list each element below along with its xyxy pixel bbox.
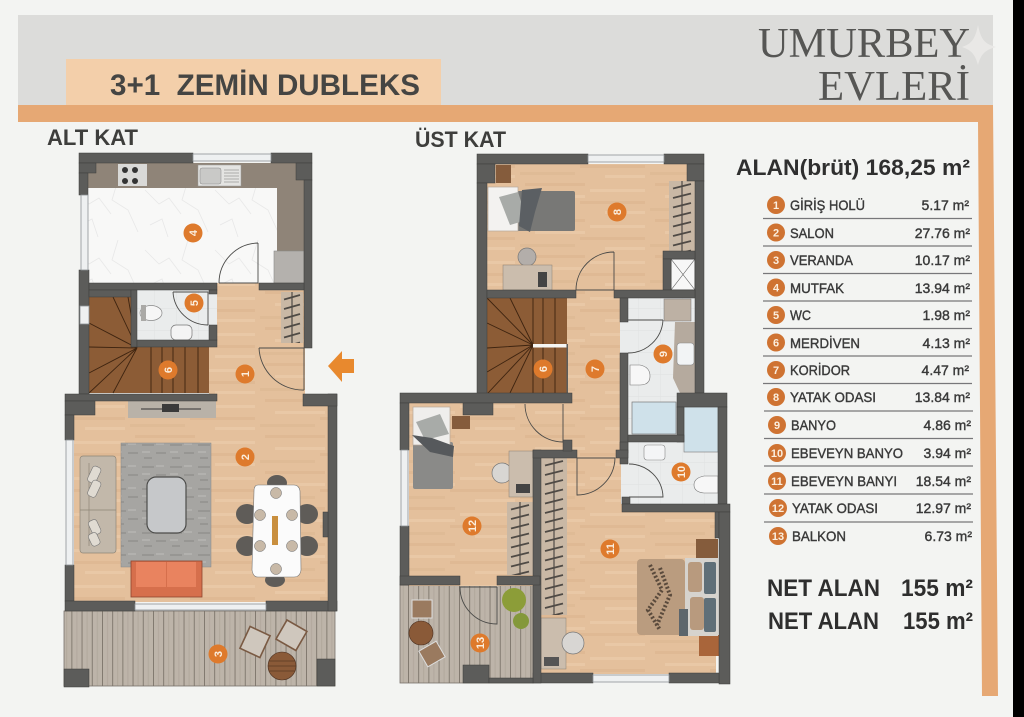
hall closet (281, 292, 303, 343)
room names: WC (790, 307, 811, 323)
balcony (400, 585, 533, 683)
sink (198, 165, 241, 186)
room numbers: 2 (240, 454, 252, 460)
badge numbers: 12 (772, 503, 784, 515)
doors (173, 243, 304, 390)
terrace furniture (240, 620, 307, 680)
balcony furniture (409, 588, 529, 667)
room names: VERANDA (790, 252, 854, 268)
net area lines: NET ALAN (768, 608, 879, 635)
badge numbers (771, 200, 784, 543)
room names: EBEVEYN BANYO (791, 445, 903, 461)
room areas: 5.17 m² (922, 197, 969, 213)
room areas: 4.86 m² (924, 417, 971, 433)
room names: EBEVEYN BANYI (791, 473, 897, 489)
stairs (89, 297, 209, 393)
walls (64, 153, 337, 687)
bath 10 floor (621, 442, 718, 504)
heading: alt kat: ALT KAT (47, 125, 139, 150)
net area lines: 155 m² (903, 608, 973, 635)
badge numbers: 8 (773, 392, 779, 404)
desk room 12 (492, 451, 533, 497)
bath 9 floor (620, 298, 695, 436)
room numbers: 12 (467, 520, 479, 532)
room numbers: 6 (538, 366, 550, 372)
badge numbers: 10 (771, 448, 783, 460)
gross area heading: ALAN(brüt) 168,25 m² (736, 155, 970, 180)
room numbers: 7 (590, 366, 602, 372)
nightstand and desk room 8 (496, 165, 552, 290)
brand name: EVLERİ (818, 64, 970, 110)
room numbers: 9 (658, 351, 670, 357)
bedroom 11 floor (540, 450, 716, 674)
bedroom 12 floor (409, 403, 568, 586)
terrace (64, 611, 335, 686)
hall floor (209, 283, 305, 398)
room numbers: 10 (676, 466, 688, 478)
bath 9 fittings (630, 299, 694, 434)
badge numbers: 5 (773, 310, 779, 322)
divider lines (763, 218, 973, 522)
dining set (236, 475, 318, 587)
room areas: 12.97 m² (916, 500, 971, 516)
room areas: 13.84 m² (915, 389, 970, 405)
photo border (1013, 0, 1024, 717)
room names: YATAK ODASI (792, 500, 878, 516)
room names: SALON (790, 225, 834, 241)
sofa left (80, 456, 116, 553)
room numbers (462, 202, 690, 652)
room names: GİRİŞ HOLÜ (790, 196, 865, 213)
room names: BALKON (792, 528, 846, 544)
room areas: 3.94 m² (924, 445, 971, 461)
brand name: UMURBEY (758, 21, 970, 67)
room numbers: 1 (240, 371, 252, 377)
bedroom 8 floor (487, 164, 687, 298)
room areas: 1.98 m² (923, 307, 970, 323)
badge numbers: 1 (773, 200, 779, 212)
room numbers: 11 (605, 543, 617, 555)
header band (18, 15, 996, 110)
panel: area table (736, 155, 973, 635)
room numbers: 8 (612, 209, 624, 215)
coffee table (147, 477, 186, 533)
stove (118, 164, 147, 186)
room names: BANYO (791, 417, 836, 433)
windows (401, 155, 669, 682)
net area lines (767, 575, 973, 635)
badge numbers: 7 (773, 365, 779, 377)
bath 9 counter (673, 322, 695, 393)
net area lines: NET ALAN (767, 575, 880, 602)
stairs (487, 298, 568, 394)
room numbers: 13 (475, 637, 487, 649)
room areas (915, 197, 972, 544)
doors (460, 252, 663, 624)
room areas: 6.73 m² (925, 528, 972, 544)
room numbers: 6 (163, 367, 175, 373)
badge numbers: 2 (773, 228, 779, 240)
shower cabinet (671, 259, 695, 290)
room areas: 13.94 m² (915, 280, 970, 296)
room numbers: 3 (213, 651, 225, 657)
kitchen counter (88, 163, 304, 251)
room numbers: 5 (189, 300, 201, 306)
floor plan: lower floor (64, 153, 354, 687)
room numbers: 4 (188, 229, 200, 236)
fridge (274, 251, 304, 283)
closets (507, 181, 695, 615)
room areas: 27.76 m² (915, 225, 970, 241)
badge numbers: 4 (773, 282, 780, 294)
bath 10 fittings (644, 407, 718, 493)
net area lines: 155 m² (901, 575, 973, 602)
entrance arrow (328, 351, 354, 382)
nightstand room 12 (452, 416, 470, 429)
kitchen floor (88, 163, 304, 283)
tv unit (128, 401, 216, 418)
room names: MERDİVEN (790, 334, 860, 351)
brand name (758, 21, 970, 110)
bed in room 8 (488, 187, 575, 232)
room names (790, 196, 903, 544)
room numbers (158, 224, 254, 664)
row badges (767, 196, 787, 545)
sparkle decoration (962, 25, 996, 65)
walls (400, 154, 730, 684)
badge numbers: 3 (773, 255, 779, 267)
badge numbers: 9 (774, 420, 780, 432)
subtitle box (66, 59, 441, 105)
orange sofa (131, 561, 202, 597)
floor plan: upper floor (400, 154, 730, 684)
orange frame (18, 105, 998, 696)
rug (121, 443, 211, 567)
wc room (137, 290, 217, 340)
badge numbers: 11 (771, 476, 783, 488)
subtitle: 3+1 ZEMİN DUBLEKS (110, 69, 420, 102)
badge numbers: 13 (772, 531, 784, 543)
room areas: 4.13 m² (923, 335, 970, 351)
heading: ust kat: ÜST KAT (415, 127, 507, 152)
room areas: 10.17 m² (915, 252, 970, 268)
room names: KORİDOR (790, 361, 850, 378)
room names: MUTFAK (790, 280, 845, 296)
room areas: 4.47 m² (922, 362, 969, 378)
badge numbers: 6 (773, 338, 779, 350)
room names: YATAK ODASI (790, 389, 876, 405)
corridor floor (567, 296, 621, 458)
room areas: 18.54 m² (916, 473, 971, 489)
windows (66, 154, 271, 610)
bedroom 11 furniture (541, 539, 720, 669)
living room floor (74, 394, 328, 602)
bed in room 12 (412, 407, 454, 489)
